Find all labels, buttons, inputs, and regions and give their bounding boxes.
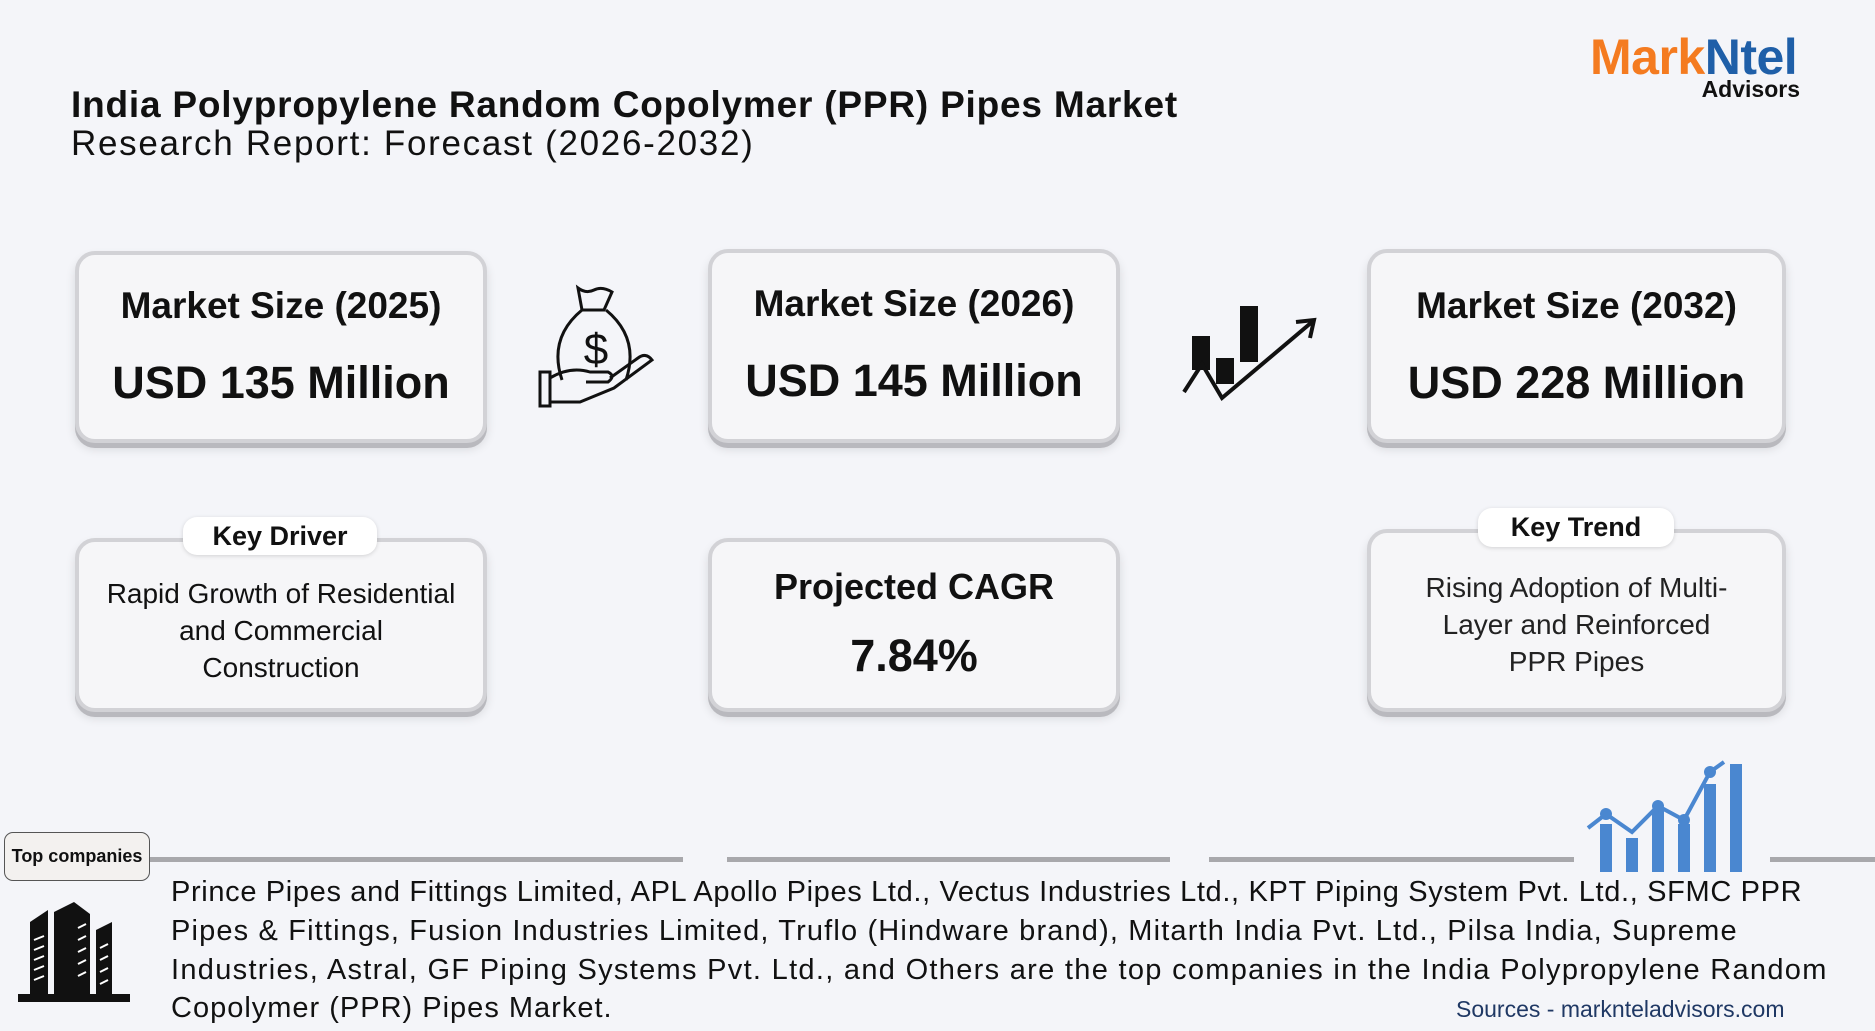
panel: projected CAGR — [708, 538, 1120, 712]
key trend tab — [1478, 508, 1674, 547]
panel: market size 2032: Market Size (2032) — [1416, 285, 1737, 326]
panel: key driver: Rapid Growth of Residential — [107, 578, 455, 609]
panel: projected CAGR: Projected CAGR — [774, 566, 1054, 607]
panel: market size 2025 — [75, 251, 487, 443]
panel: market size 2026 — [708, 249, 1120, 443]
icon: bar chart — [1586, 760, 1742, 872]
sources: Sources - marknteladvisors.com — [1456, 996, 1784, 1022]
panel: market size 2025: Market Size (2025) — [121, 285, 441, 326]
icon: money bag in hand: $ — [584, 325, 608, 374]
panel: projected CAGR: 7.84% — [850, 630, 978, 681]
panel: key trend — [1367, 529, 1786, 712]
key driver tab — [183, 517, 377, 555]
icon: buildings — [18, 902, 130, 1002]
panel: key trend: PPR Pipes — [1509, 646, 1644, 677]
panel: key trend: Rising Adoption of Multi- — [1426, 572, 1727, 603]
panel: market size 2032: USD 228 Million — [1408, 357, 1745, 408]
panel: key trend: Layer and Reinforced — [1443, 609, 1710, 640]
panel: market size 2032 — [1367, 249, 1786, 443]
panel: key driver — [75, 538, 487, 712]
panel: key driver: Construction — [202, 652, 360, 683]
panel: market size 2026: USD 145 Million — [745, 355, 1083, 406]
panel: key driver: and Commercial — [179, 615, 383, 646]
key trend tab: Key Trend — [1511, 512, 1641, 542]
top companies badge — [4, 832, 150, 881]
key driver tab: Key Driver — [212, 521, 348, 551]
panel: market size 2026: Market Size (2026) — [754, 283, 1074, 324]
company list text: Prince Pipes and Fittings Limited, APL Apollo Pipes Ltd., Vectus Industries Ltd., KPT Piping System Pvt. Ltd., SFMC PPR — [171, 876, 1802, 908]
company list text: Pipes & Fittings, Fusion Industries Limited, Truflo (Hindware brand), Mitarth India Pvt. Ltd., Pilsa India, Supreme — [171, 915, 1738, 947]
company list text: Industries, Astral, GF Piping Systems Pvt. Ltd., and Others are the top companies in the India Polypropylene Random — [171, 954, 1828, 986]
company list text: Copolymer (PPR) Pipes Market. — [171, 992, 613, 1024]
icon: money bag in hand — [538, 284, 654, 408]
panel: market size 2025: USD 135 Million — [112, 357, 450, 408]
title: Research Report: Forecast (2026-2032) — [71, 124, 754, 163]
logo: Advisors — [1702, 76, 1800, 102]
company list text — [171, 876, 1828, 1024]
logo: MarkNtel — [1590, 29, 1797, 85]
icon: growth chart arrow — [1182, 306, 1316, 401]
title: India Polypropylene Random Copolymer (PPR) Pipes Market — [71, 84, 1178, 125]
top companies badge: Top companies — [12, 846, 142, 866]
title — [71, 84, 1178, 163]
